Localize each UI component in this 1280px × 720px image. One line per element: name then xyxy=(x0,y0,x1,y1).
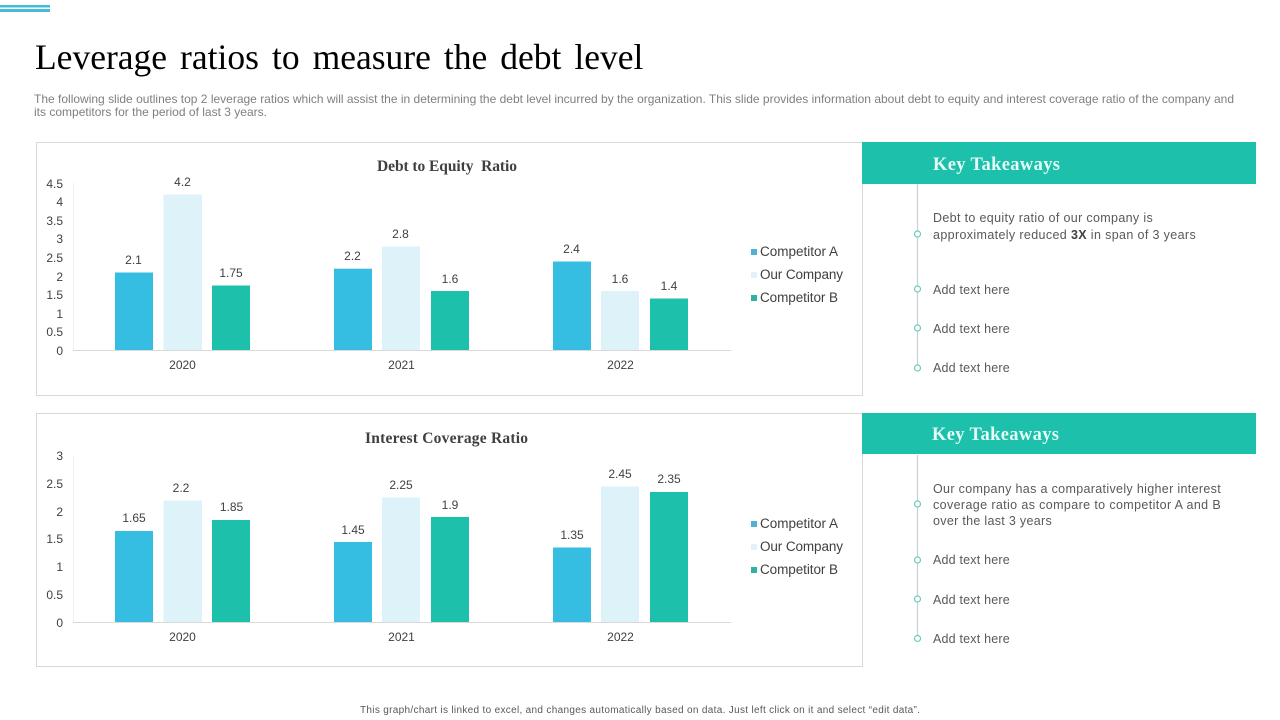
value labels: 1.6 xyxy=(612,272,629,286)
takeaway text: coverage ratio as compare to competitor A and B xyxy=(933,498,1221,512)
legend xyxy=(751,516,843,577)
legend xyxy=(751,244,843,305)
takeaway text: Our company has a comparatively higher interest xyxy=(933,482,1221,496)
header xyxy=(862,142,1256,184)
y axis labels: 0 xyxy=(56,344,63,358)
takeaway text: Add text here xyxy=(933,322,1010,336)
value labels: 1.4 xyxy=(661,279,678,293)
timeline xyxy=(914,184,920,371)
takeaway text: Add text here xyxy=(933,283,1010,297)
value labels: 2.25 xyxy=(389,478,413,492)
value labels: 1.85 xyxy=(220,500,244,514)
takeaway text: Debt to equity ratio of our company is xyxy=(933,211,1153,225)
year labels: 2021 xyxy=(388,358,415,372)
y axis labels: 3.5 xyxy=(46,214,63,228)
header: Key Takeaways xyxy=(932,425,1059,445)
timeline xyxy=(914,455,920,642)
value labels: 2.35 xyxy=(657,472,681,486)
takeaway text: Add text here xyxy=(933,632,1010,646)
panel: interest coverage chart xyxy=(36,414,862,666)
panel: debt to equity chart xyxy=(36,142,862,396)
takeaway text: Add text here xyxy=(933,361,1010,375)
description: its competitors for the period of last 3 years. xyxy=(34,105,267,119)
takeaway text xyxy=(933,482,1221,646)
description: The following slide outlines top 2 leverage ratios which will assist the in determining the debt level incurred by the organization. This slide provides information about debt to equity and interest coverage ratio of the company and xyxy=(34,92,1234,106)
y axis labels: 0.5 xyxy=(46,325,63,339)
year labels: 2020 xyxy=(169,358,196,372)
header xyxy=(862,413,1256,454)
legend: Competitor B xyxy=(760,562,838,577)
value labels: 4.2 xyxy=(174,175,191,189)
y axis labels: 1.5 xyxy=(46,532,63,546)
y axis labels: 0.5 xyxy=(46,588,63,602)
year labels: 2022 xyxy=(607,358,634,372)
y axis labels: 2 xyxy=(56,505,63,519)
chart title: interest coverage: Interest Coverage Ratio xyxy=(365,430,528,447)
y axis labels: 4.5 xyxy=(46,177,63,191)
y axis labels: 3 xyxy=(56,232,63,246)
axes xyxy=(73,183,731,350)
year labels: 2020 xyxy=(169,630,196,644)
takeaway text: Add text here xyxy=(933,553,1010,567)
value labels: 2.2 xyxy=(173,481,190,495)
takeaway text: Add text here xyxy=(933,593,1010,607)
description xyxy=(34,92,1234,119)
legend: Our Company xyxy=(760,267,843,282)
year labels: 2021 xyxy=(388,630,415,644)
legend: Our Company xyxy=(760,539,843,554)
y axis labels: 1 xyxy=(56,560,63,574)
accent bars xyxy=(0,5,50,12)
y axis labels: 0 xyxy=(56,616,63,630)
y axis labels: 2 xyxy=(56,270,63,284)
legend: Competitor B xyxy=(760,290,838,305)
value labels: 1.35 xyxy=(560,528,584,542)
value labels: 1.9 xyxy=(442,498,459,512)
footnote: This graph/chart is linked to excel, and changes automatically based on data. Just left click on it and select “edit data”. xyxy=(360,705,920,716)
year labels xyxy=(169,358,634,372)
y axis labels: 2.5 xyxy=(46,477,63,491)
value labels xyxy=(122,467,681,542)
value labels: 2.1 xyxy=(125,253,142,267)
value labels: 1.65 xyxy=(122,511,146,525)
value labels xyxy=(125,175,678,293)
chart title: debt to equity: Debt to Equity Ratio xyxy=(377,158,517,175)
value labels: 1.6 xyxy=(442,272,459,286)
value labels: 2.4 xyxy=(563,242,580,256)
value labels: 1.75 xyxy=(219,266,243,280)
y axis labels: 1 xyxy=(56,307,63,321)
panel: key takeaways 2 xyxy=(862,413,1256,646)
takeaway text: over the last 3 years xyxy=(933,514,1052,528)
y axis labels xyxy=(46,449,63,630)
y axis labels: 4 xyxy=(56,195,63,209)
year labels: 2022 xyxy=(607,630,634,644)
value labels: 2.2 xyxy=(344,249,361,263)
y axis labels: 3 xyxy=(56,449,63,463)
y axis labels xyxy=(46,177,63,358)
axes xyxy=(73,456,731,622)
bars xyxy=(115,486,688,622)
takeaway text: approximately reduced 3X in span of 3 years xyxy=(933,228,1196,242)
y axis labels: 1.5 xyxy=(46,288,63,302)
value labels: 2.8 xyxy=(392,227,409,241)
y axis labels: 2.5 xyxy=(46,251,63,265)
header: Key Takeaways xyxy=(933,155,1060,175)
value labels: 2.45 xyxy=(608,467,632,481)
takeaway text xyxy=(933,211,1196,375)
value labels: 1.45 xyxy=(341,523,365,537)
legend: Competitor A xyxy=(760,244,838,259)
bars xyxy=(115,194,688,350)
legend: Competitor A xyxy=(760,516,838,531)
year labels xyxy=(169,630,634,644)
title: Leverage ratios to measure the debt level xyxy=(35,37,644,77)
panel: key takeaways 1 xyxy=(862,142,1256,375)
